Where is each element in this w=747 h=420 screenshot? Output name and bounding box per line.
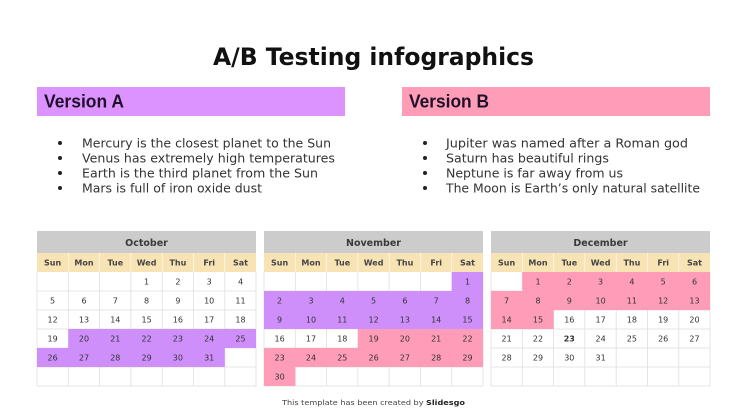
text block: version A bullets: Mercury is the closest planet to the Sun [82, 136, 331, 150]
calendar: December: 6 [692, 278, 697, 286]
calendar: November: 15 [462, 316, 473, 324]
calendar: December: 25 [627, 334, 637, 344]
calendar: November: November [346, 238, 401, 249]
calendar: November: 29 [462, 354, 473, 362]
calendar: October [37, 231, 256, 386]
calendar: October: 17 [204, 316, 214, 324]
calendar: October: 4 [238, 278, 243, 286]
calendar: December: 28 [502, 354, 512, 362]
calendar: November: 11 [337, 316, 347, 324]
calendar: November: 2 [277, 296, 282, 306]
calendar: October: 18 [235, 316, 246, 324]
calendar: November: 7 [434, 296, 439, 306]
calendar: October: 14 [110, 316, 120, 324]
calendar: November: 24 [306, 354, 316, 362]
calendar: November: 17 [306, 334, 316, 344]
calendar: November: 4 [340, 296, 345, 306]
calendar: November: 1 [465, 278, 470, 286]
calendar: November: 9 [277, 316, 282, 324]
calendar: December: 8 [535, 296, 541, 306]
calendar: November: 12 [369, 316, 379, 324]
text block: version A bullets: Venus has extremely high temperatures [82, 150, 335, 166]
calendar: November: 16 [275, 334, 285, 344]
calendar: December: 29 [533, 354, 543, 362]
calendar: November: 20 [400, 334, 410, 344]
calendar: October: 7 [113, 296, 118, 306]
calendar: December: 18 [627, 316, 637, 324]
calendar: October: 23 [173, 334, 183, 344]
text block: version B bullets [423, 136, 700, 196]
calendar: November: 8 [465, 296, 470, 306]
calendar: December: 31 [596, 354, 606, 362]
calendar: December: 5 [661, 278, 666, 286]
calendar: October: 10 [204, 296, 214, 306]
calendar: November: 13 [400, 316, 410, 324]
text block: version A bullets [58, 136, 335, 196]
text block: version A bullets: Mars is full of iron oxide dust [82, 180, 262, 196]
calendar: November: 22 [462, 334, 473, 344]
calendar: November: 3 [308, 296, 314, 306]
calendar: December: 27 [689, 334, 700, 344]
calendar: November: 14 [431, 316, 441, 324]
calendar: December: 16 [564, 316, 574, 324]
calendar: December: 30 [564, 354, 574, 362]
calendar: October: 2 [175, 278, 180, 286]
panel: version A heading: Version A [44, 90, 124, 112]
calendar: November: 27 [400, 354, 410, 362]
calendar: November [264, 231, 483, 386]
calendar: December: 2 [567, 278, 572, 286]
text block: version B bullets: Saturn has beautiful rings [446, 150, 609, 166]
calendar: October: 9 [175, 296, 180, 306]
calendar: December: 9 [567, 296, 572, 306]
calendar: December: 21 [502, 334, 512, 344]
calendar: December: 24 [596, 334, 606, 344]
text block: version B bullets: The Moon is Earth’s only natural satellite [445, 180, 700, 196]
title: A/B Testing infographics [213, 43, 534, 71]
calendar: November: 23 [275, 354, 285, 362]
calendar: October: 27 [79, 354, 89, 362]
calendar: October: 30 [173, 354, 183, 362]
calendar: October: 25 [235, 334, 246, 344]
calendar: October: 19 [48, 334, 58, 344]
calendar: October: 20 [79, 334, 89, 344]
calendar: October: 15 [142, 316, 152, 324]
calendar: December: 19 [658, 316, 668, 324]
calendar: December: 14 [502, 316, 512, 324]
calendar: December: 26 [658, 334, 668, 344]
calendar: October: 5 [50, 296, 55, 306]
text block: version B bullets: Neptune is far away from us [446, 166, 623, 180]
calendar: December: 20 [689, 316, 700, 324]
calendar: October: 31 [204, 354, 214, 362]
calendar: October: 13 [79, 316, 89, 324]
calendar: December: 1 [535, 278, 541, 286]
calendar: October: October [125, 238, 168, 249]
calendar: October: 8 [144, 296, 149, 306]
panel: version B heading [402, 87, 710, 116]
calendar: October: 22 [142, 334, 152, 344]
calendar: December: 10 [596, 296, 606, 306]
text block: version B bullets: Jupiter was named after a Roman god [445, 136, 688, 150]
calendar: November: 18 [337, 334, 347, 344]
calendar: November: 6 [402, 296, 407, 306]
calendar: October: 11 [235, 296, 246, 306]
calendar: October: 16 [173, 316, 183, 324]
calendar: December: 17 [596, 316, 606, 324]
calendar: December: 23 [564, 334, 575, 344]
calendar: October: 24 [204, 334, 214, 344]
calendar: December: 12 [658, 296, 668, 306]
calendar: November: 21 [431, 334, 441, 344]
calendar: December [491, 231, 710, 386]
calendar: October: 3 [207, 278, 212, 286]
calendar: December: 22 [533, 334, 543, 344]
calendar: December: 4 [629, 278, 634, 286]
calendar: November: 25 [337, 354, 347, 362]
panel: version B heading: Version B [409, 90, 489, 112]
calendar: October: 21 [110, 334, 120, 344]
calendar: December: 15 [533, 316, 543, 324]
calendar: November: 5 [371, 296, 376, 306]
calendar: November: 28 [431, 354, 441, 362]
calendar: October: 29 [142, 354, 152, 362]
calendar: October: 28 [110, 354, 120, 362]
calendar: December: December [573, 238, 628, 249]
footer credit: This template has been created by Slidesgo [281, 398, 465, 407]
calendar: December: 11 [627, 296, 637, 306]
text block: version A bullets: Earth is the third planet from the Sun [82, 166, 318, 180]
calendar: October: 12 [48, 316, 58, 324]
calendar: October: 26 [48, 354, 58, 362]
calendar: December: 3 [598, 278, 603, 286]
calendar: November: 10 [306, 316, 316, 324]
calendar: November: 26 [369, 354, 379, 362]
panel: version A heading [37, 87, 345, 116]
calendar: November: 19 [369, 334, 379, 344]
calendar: December: 13 [689, 296, 700, 306]
calendar: December: 7 [504, 296, 509, 306]
calendar: November: 30 [275, 372, 285, 382]
calendar: October: 6 [81, 296, 87, 306]
calendar: October: 1 [144, 278, 149, 286]
